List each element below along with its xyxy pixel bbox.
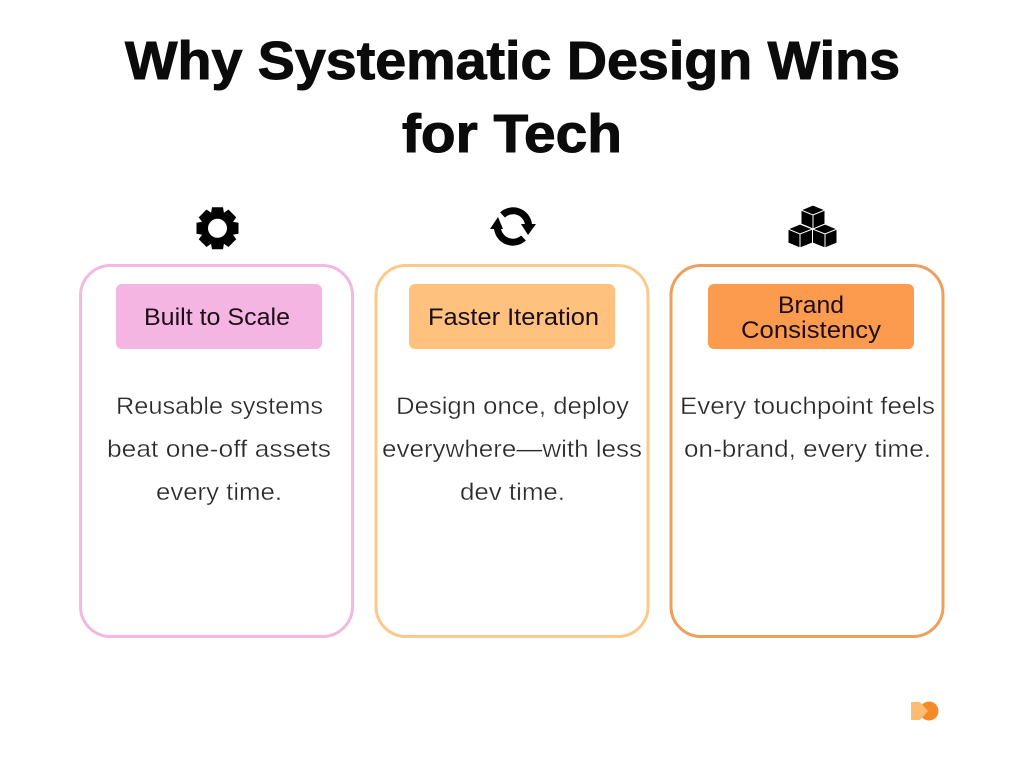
label: Faster Iteration bbox=[409, 284, 615, 349]
title bbox=[125, 31, 900, 164]
text: Faster Iteration description: Design once, deploy bbox=[396, 393, 630, 420]
panel: Built to Scale bbox=[80, 266, 352, 636]
label: Built to Scale: Built to Scale bbox=[144, 304, 290, 331]
text: Faster Iteration description bbox=[382, 393, 642, 506]
text: Faster Iteration description: dev time. bbox=[460, 479, 565, 506]
text: Brand Consistency description: Every touchpoint feels bbox=[680, 393, 935, 420]
panel: Faster Iteration bbox=[376, 266, 648, 636]
label: Brand Consistency: Brand bbox=[778, 292, 844, 319]
title: for Tech bbox=[402, 104, 622, 164]
title: Why Systematic Design Wins bbox=[125, 31, 900, 91]
panel: Brand Consistency bbox=[671, 266, 943, 636]
icon: circular arrows bbox=[490, 211, 536, 242]
icon: logo bbox=[911, 702, 938, 720]
text: Built to Scale description bbox=[107, 393, 331, 506]
text: Brand Consistency description: on-brand, every time. bbox=[684, 436, 931, 463]
label: Built to Scale bbox=[116, 284, 322, 349]
label: Brand Consistency: Consistency bbox=[741, 317, 881, 344]
icon: stacked cubes bbox=[788, 205, 837, 248]
icon: gear bbox=[196, 207, 238, 249]
text: Built to Scale description: Reusable systems bbox=[116, 393, 323, 420]
label: Brand Consistency bbox=[708, 284, 914, 349]
text: Built to Scale description: every time. bbox=[156, 479, 282, 506]
text: Brand Consistency description bbox=[680, 393, 935, 463]
label: Faster Iteration: Faster Iteration bbox=[428, 304, 599, 331]
text: Faster Iteration description: everywhere—with less bbox=[382, 436, 642, 463]
text: Built to Scale description: beat one-off assets bbox=[107, 436, 331, 463]
